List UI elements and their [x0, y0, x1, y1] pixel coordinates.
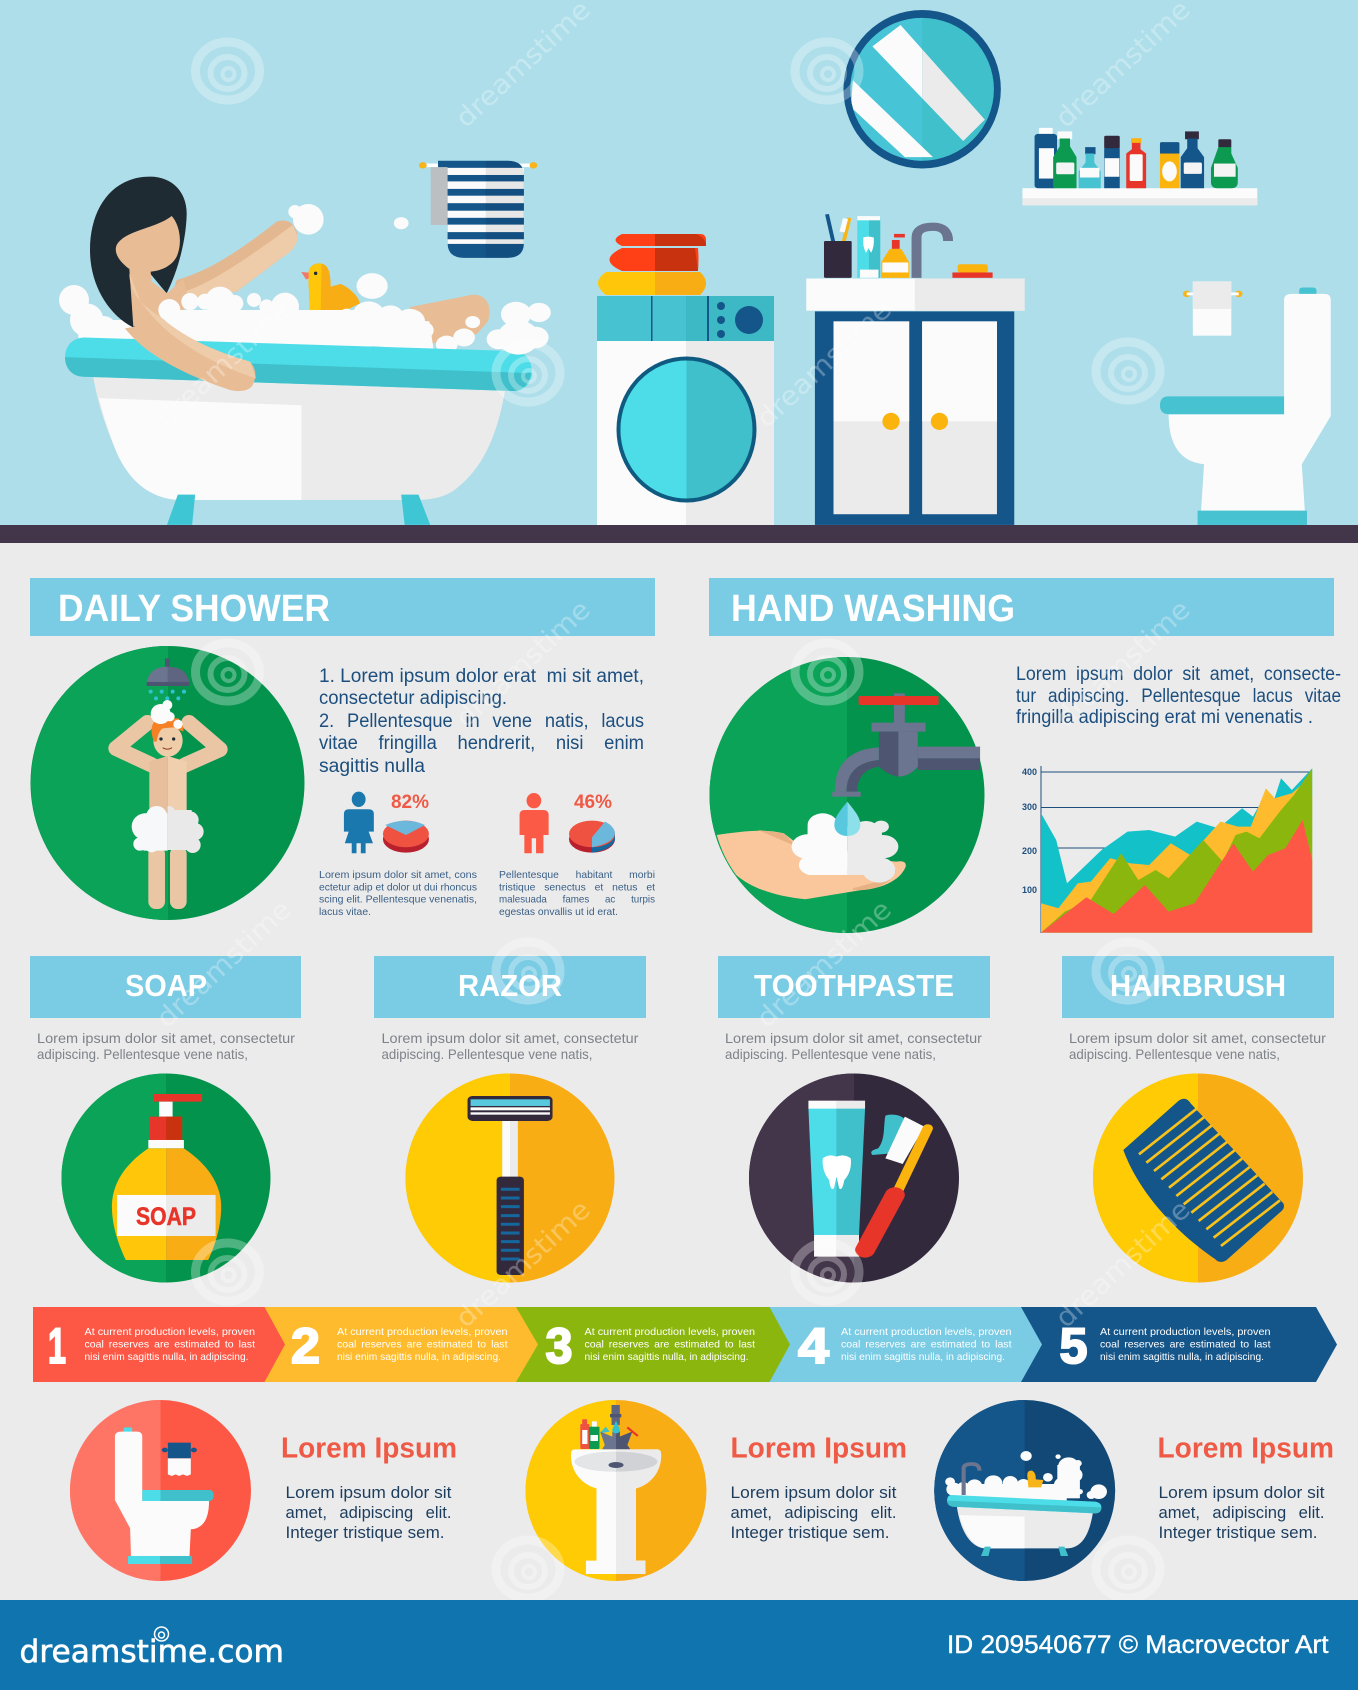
watermarks: dreamstime	[1050, 594, 1197, 734]
feature: sink	[526, 1400, 907, 1581]
toiletries	[580, 1419, 610, 1449]
panel: soap	[30, 956, 301, 1282]
step 3 text: coal reserves are estimated to last	[584, 1339, 755, 1351]
axis labels: 200	[1022, 846, 1037, 856]
description	[382, 1030, 639, 1062]
description: adipiscing. Pellentesque vene natis,	[382, 1046, 592, 1062]
soap bar	[952, 264, 993, 278]
floating bubbles	[357, 217, 409, 299]
icon: man showering	[116, 658, 220, 909]
foam	[792, 813, 898, 883]
text block: Lorem ipsum dolor sit	[286, 1483, 452, 1502]
watermarks: dreamstime	[450, 0, 597, 134]
icon: pedestal sink	[571, 1405, 661, 1574]
foam behind woman	[59, 285, 138, 344]
text block: Lorem ipsum dolor sit amet, consecte-	[1016, 664, 1341, 685]
stat: man 46%	[520, 792, 615, 853]
head foam	[151, 700, 183, 729]
caption left: lacus vitae.	[319, 906, 371, 918]
tub body	[93, 377, 505, 500]
step 2 text: At current production levels, proven	[337, 1326, 508, 1338]
step 5 text: nisi enim sagittis nulla, in adipiscing.	[1100, 1351, 1264, 1363]
text block: consectetur adipiscing.	[319, 688, 507, 709]
step 1 text: nisi enim sagittis nulla, in adipiscing.	[84, 1351, 248, 1363]
text block: vitae fringilla hendrerit, nisi enim	[319, 733, 644, 754]
sink top	[806, 279, 1025, 311]
caption right: Pellentesque habitant morbi	[499, 869, 655, 881]
number 3: 3	[546, 1318, 572, 1374]
step 3 arrow	[500, 1307, 790, 1382]
bottle 2	[1053, 131, 1077, 188]
icon: soap bottle	[112, 1094, 221, 1260]
text block	[1158, 1483, 1325, 1542]
heading bar	[30, 956, 301, 1018]
circle	[70, 1400, 251, 1581]
raised arm	[170, 221, 297, 302]
text block: 2. Pellentesque in vene natis, lacus	[319, 711, 644, 732]
control panel	[597, 296, 774, 341]
circle	[749, 1074, 959, 1282]
description: adipiscing. Pellentesque vene natis,	[37, 1046, 248, 1062]
step 5 text: At current production levels, proven	[1100, 1326, 1271, 1338]
footer bar	[0, 1600, 1358, 1690]
text block: amet, adipiscing elit.	[286, 1503, 452, 1522]
bottle 8	[1211, 139, 1238, 188]
description: Lorem ipsum dolor sit amet, consectetur	[1069, 1030, 1326, 1046]
panel: daily shower	[30, 578, 655, 920]
watermarks: dreamstime	[450, 1194, 597, 1334]
stat: woman 82%	[344, 792, 429, 853]
area chart	[1022, 766, 1312, 933]
cabinet doors	[834, 321, 997, 514]
icon: man	[520, 793, 549, 853]
shower head	[147, 658, 189, 700]
axis labels: 400	[1022, 767, 1037, 777]
watermarks: dreamstime	[751, 294, 898, 434]
watermarks: dreamstime	[151, 294, 298, 434]
caption right: malesuada fames ac turpis	[499, 894, 655, 906]
woman in tub	[65, 217, 551, 525]
text block: Integer tristique sem.	[1158, 1523, 1318, 1542]
feature: toilet	[70, 1400, 457, 1581]
hair	[90, 177, 187, 328]
text block: amet, adipiscing elit.	[1158, 1503, 1324, 1522]
text block	[319, 666, 644, 777]
tap	[917, 227, 948, 278]
striped towel on rail	[419, 161, 537, 258]
brush	[865, 1115, 928, 1250]
text block: Lorem ipsum dolor sit	[730, 1483, 897, 1502]
text block	[286, 1483, 452, 1542]
description	[37, 1030, 295, 1062]
description: adipiscing. Pellentesque vene natis,	[1069, 1046, 1280, 1062]
image credit: ID 209540677 © Macrovector Art	[947, 1631, 1329, 1659]
step 4 text: At current production levels, proven	[841, 1326, 1012, 1338]
sink cabinet	[806, 214, 1025, 525]
toilet cap	[1299, 287, 1316, 296]
tap	[964, 1464, 979, 1495]
caption right: tristique senectus et netus et	[499, 882, 655, 894]
icon: toothpaste and brush	[808, 1101, 928, 1257]
text block: Lorem ipsum dolor sit	[1158, 1483, 1325, 1502]
step 1 text: coal reserves are estimated to last	[84, 1339, 255, 1351]
step 2 text: nisi enim sagittis nulla, in adipiscing.	[337, 1351, 501, 1363]
heading: RAZOR	[458, 968, 562, 1003]
logo text: dreamstime.com	[20, 1634, 284, 1670]
icon: razor	[468, 1096, 553, 1275]
tub feet	[167, 495, 430, 525]
circle	[526, 1400, 706, 1581]
bottle 5	[1126, 138, 1146, 188]
icon: toilet	[115, 1427, 213, 1564]
cabinet frame	[815, 311, 1014, 525]
panel: hand washing	[709, 578, 1341, 933]
toothpaste tube	[857, 216, 880, 278]
torso	[149, 756, 187, 813]
heading bar	[30, 578, 655, 636]
tub rim	[65, 337, 532, 391]
gridlines and axis	[1041, 766, 1312, 933]
heading: HAND WASHING	[731, 588, 1015, 630]
arrow band: five steps	[33, 1307, 1337, 1382]
bottle 7	[1181, 131, 1204, 188]
caption right: egestas onvallis ut id erat.	[499, 906, 618, 918]
circle	[1093, 1074, 1303, 1282]
number 2: 2	[291, 1318, 320, 1374]
toilet body	[1169, 294, 1331, 511]
toilet paper	[1183, 281, 1243, 336]
water drop	[834, 802, 860, 836]
axis labels	[1022, 767, 1037, 895]
text block: amet, adipiscing elit.	[730, 1503, 896, 1522]
step 1 text: At current production levels, proven	[84, 1326, 255, 1338]
bottle 3	[1079, 147, 1101, 188]
text block: fringilla adipiscing erat mi venenatis .	[1016, 707, 1313, 728]
toothbrush cup	[824, 214, 852, 278]
comb slots	[1139, 1109, 1280, 1246]
step 2 arrow	[250, 1307, 538, 1382]
legs	[148, 847, 187, 909]
icon: woman	[344, 792, 374, 853]
caption left: scing elit. Pellentesque venenatis,	[319, 894, 477, 906]
heading: SOAP	[125, 968, 207, 1003]
pie chart	[383, 821, 429, 853]
folded towels	[598, 234, 706, 295]
step 4 text: nisi enim sagittis nulla, in adipiscing.	[841, 1351, 1005, 1363]
text block: 1. Lorem ipsum dolor erat mi sit amet,	[319, 666, 644, 687]
bottle 6	[1160, 142, 1179, 188]
tube	[808, 1101, 865, 1257]
description: Lorem ipsum dolor sit amet, consectetur	[382, 1030, 639, 1046]
knee	[410, 295, 490, 345]
heading bar	[718, 956, 990, 1018]
step 1 text	[84, 1326, 255, 1363]
shower circle	[30, 646, 304, 920]
round mirror	[843, 10, 1001, 169]
number 4: 4	[798, 1318, 829, 1374]
hair	[151, 718, 184, 742]
heading bar	[1062, 956, 1334, 1018]
description: adipiscing. Pellentesque vene natis,	[725, 1046, 936, 1062]
tub feet	[981, 1547, 1068, 1556]
foam	[945, 1451, 1107, 1501]
arms	[116, 723, 220, 765]
heading: DAILY SHOWER	[58, 588, 330, 630]
scene: bathroom illustration	[0, 0, 1358, 543]
panel: toothpaste	[718, 956, 990, 1282]
tub rim	[947, 1495, 1101, 1513]
number 1: 1	[48, 1318, 66, 1374]
caption left: ectetur adip et dolor ut dui rhoncus	[319, 882, 477, 894]
step 5 text: coal reserves are estimated to last	[1100, 1339, 1271, 1351]
pie chart	[569, 821, 615, 853]
text block: sagittis nulla	[319, 756, 425, 777]
shelf	[1022, 188, 1257, 205]
icon: comb	[1123, 1099, 1284, 1262]
hand	[717, 830, 906, 899]
washing machine	[597, 296, 774, 525]
description: Lorem ipsum dolor sit amet, consectetur	[725, 1030, 982, 1046]
door	[618, 358, 754, 500]
bottle 1	[1035, 128, 1057, 188]
woman upper body	[59, 177, 377, 348]
rubber duck	[301, 263, 360, 317]
heading bar	[709, 578, 1334, 636]
step 3 text	[584, 1326, 755, 1363]
watermarks: dreamstime	[1050, 0, 1197, 134]
heading: Lorem Ipsum	[281, 1433, 457, 1465]
circle	[934, 1400, 1115, 1581]
heading: Lorem Ipsum	[1158, 1433, 1334, 1465]
machine body	[597, 341, 774, 525]
floor	[0, 525, 1358, 543]
comb body	[1123, 1099, 1284, 1262]
footer	[0, 1600, 1358, 1690]
step 1 arrow	[33, 1307, 285, 1382]
heading: TOOTHPASTE	[754, 968, 954, 1003]
towel fold	[431, 167, 448, 225]
text block	[1016, 664, 1341, 728]
heading: HAIRBRUSH	[1110, 968, 1286, 1003]
face	[159, 737, 175, 749]
step 4 text	[841, 1326, 1012, 1363]
watermarks: dreamstime	[151, 894, 298, 1034]
toilet seat	[1160, 396, 1284, 414]
front arm	[125, 273, 256, 391]
heading: Lorem Ipsum	[730, 1433, 907, 1465]
bottle 4	[1104, 136, 1120, 188]
icon: bathtub	[945, 1451, 1107, 1556]
description: Lorem ipsum dolor sit amet, consectetur	[37, 1030, 295, 1046]
hand bubble	[288, 204, 324, 235]
percent: 46%	[574, 792, 612, 813]
caption left: Lorem ipsum dolor sit amet, cons	[319, 869, 477, 881]
percent: 82%	[391, 792, 429, 813]
step 5 arrow	[1000, 1307, 1337, 1382]
description	[725, 1030, 982, 1062]
step 3 text: At current production levels, proven	[584, 1326, 755, 1338]
heading bar	[374, 956, 646, 1018]
towel rail	[419, 162, 537, 169]
areas	[1041, 768, 1312, 933]
head	[153, 725, 183, 757]
description	[1069, 1030, 1326, 1062]
step 4 text: coal reserves are estimated to last	[841, 1339, 1012, 1351]
circle	[405, 1074, 614, 1282]
watermarks: dreamstime	[450, 594, 597, 734]
circle	[61, 1074, 270, 1282]
basin and pedestal	[571, 1449, 661, 1574]
foam towel	[132, 806, 204, 853]
logo spiral	[154, 1627, 168, 1641]
toilet and paper roll	[1160, 281, 1331, 525]
tap	[600, 1405, 638, 1449]
tap handle	[859, 693, 939, 723]
watermarks	[151, 0, 1197, 1598]
step 4 arrow	[750, 1307, 1042, 1382]
shelf with bottles	[1022, 128, 1257, 205]
wall	[0, 0, 1358, 525]
neck and torso	[129, 268, 190, 327]
icon: tap and hand	[717, 693, 980, 899]
face	[116, 216, 180, 272]
tap body	[832, 723, 980, 797]
axis labels: 100	[1022, 885, 1037, 895]
text block: Integer tristique sem.	[730, 1523, 890, 1542]
feature: bath	[934, 1400, 1334, 1581]
step 2 text	[337, 1326, 508, 1363]
bottle label: SOAP	[136, 1203, 196, 1231]
axis labels: 300	[1022, 802, 1037, 812]
tub body	[957, 1507, 1094, 1548]
panel: hairbrush	[1062, 956, 1334, 1282]
caption right	[499, 869, 655, 918]
washing circle	[710, 657, 984, 933]
toilet base	[1198, 511, 1307, 525]
text block	[730, 1483, 897, 1542]
text block: Integer tristique sem.	[286, 1523, 444, 1542]
caption left	[319, 869, 477, 918]
foam on tub end	[487, 302, 551, 355]
duck	[1027, 1471, 1043, 1487]
panel: razor	[374, 956, 646, 1282]
watermarks: dreamstime	[1050, 1194, 1197, 1334]
number 5: 5	[1060, 1318, 1088, 1374]
soap dispenser	[881, 234, 909, 278]
foam in tub, right part	[347, 301, 480, 354]
step 5 text	[1100, 1326, 1271, 1363]
step 3 text: nisi enim sagittis nulla, in adipiscing.	[584, 1351, 748, 1363]
foam in tub, left part	[158, 287, 377, 348]
step 2 text: coal reserves are estimated to last	[337, 1339, 508, 1351]
towel body	[438, 161, 524, 258]
watermarks: dreamstime	[751, 894, 898, 1034]
